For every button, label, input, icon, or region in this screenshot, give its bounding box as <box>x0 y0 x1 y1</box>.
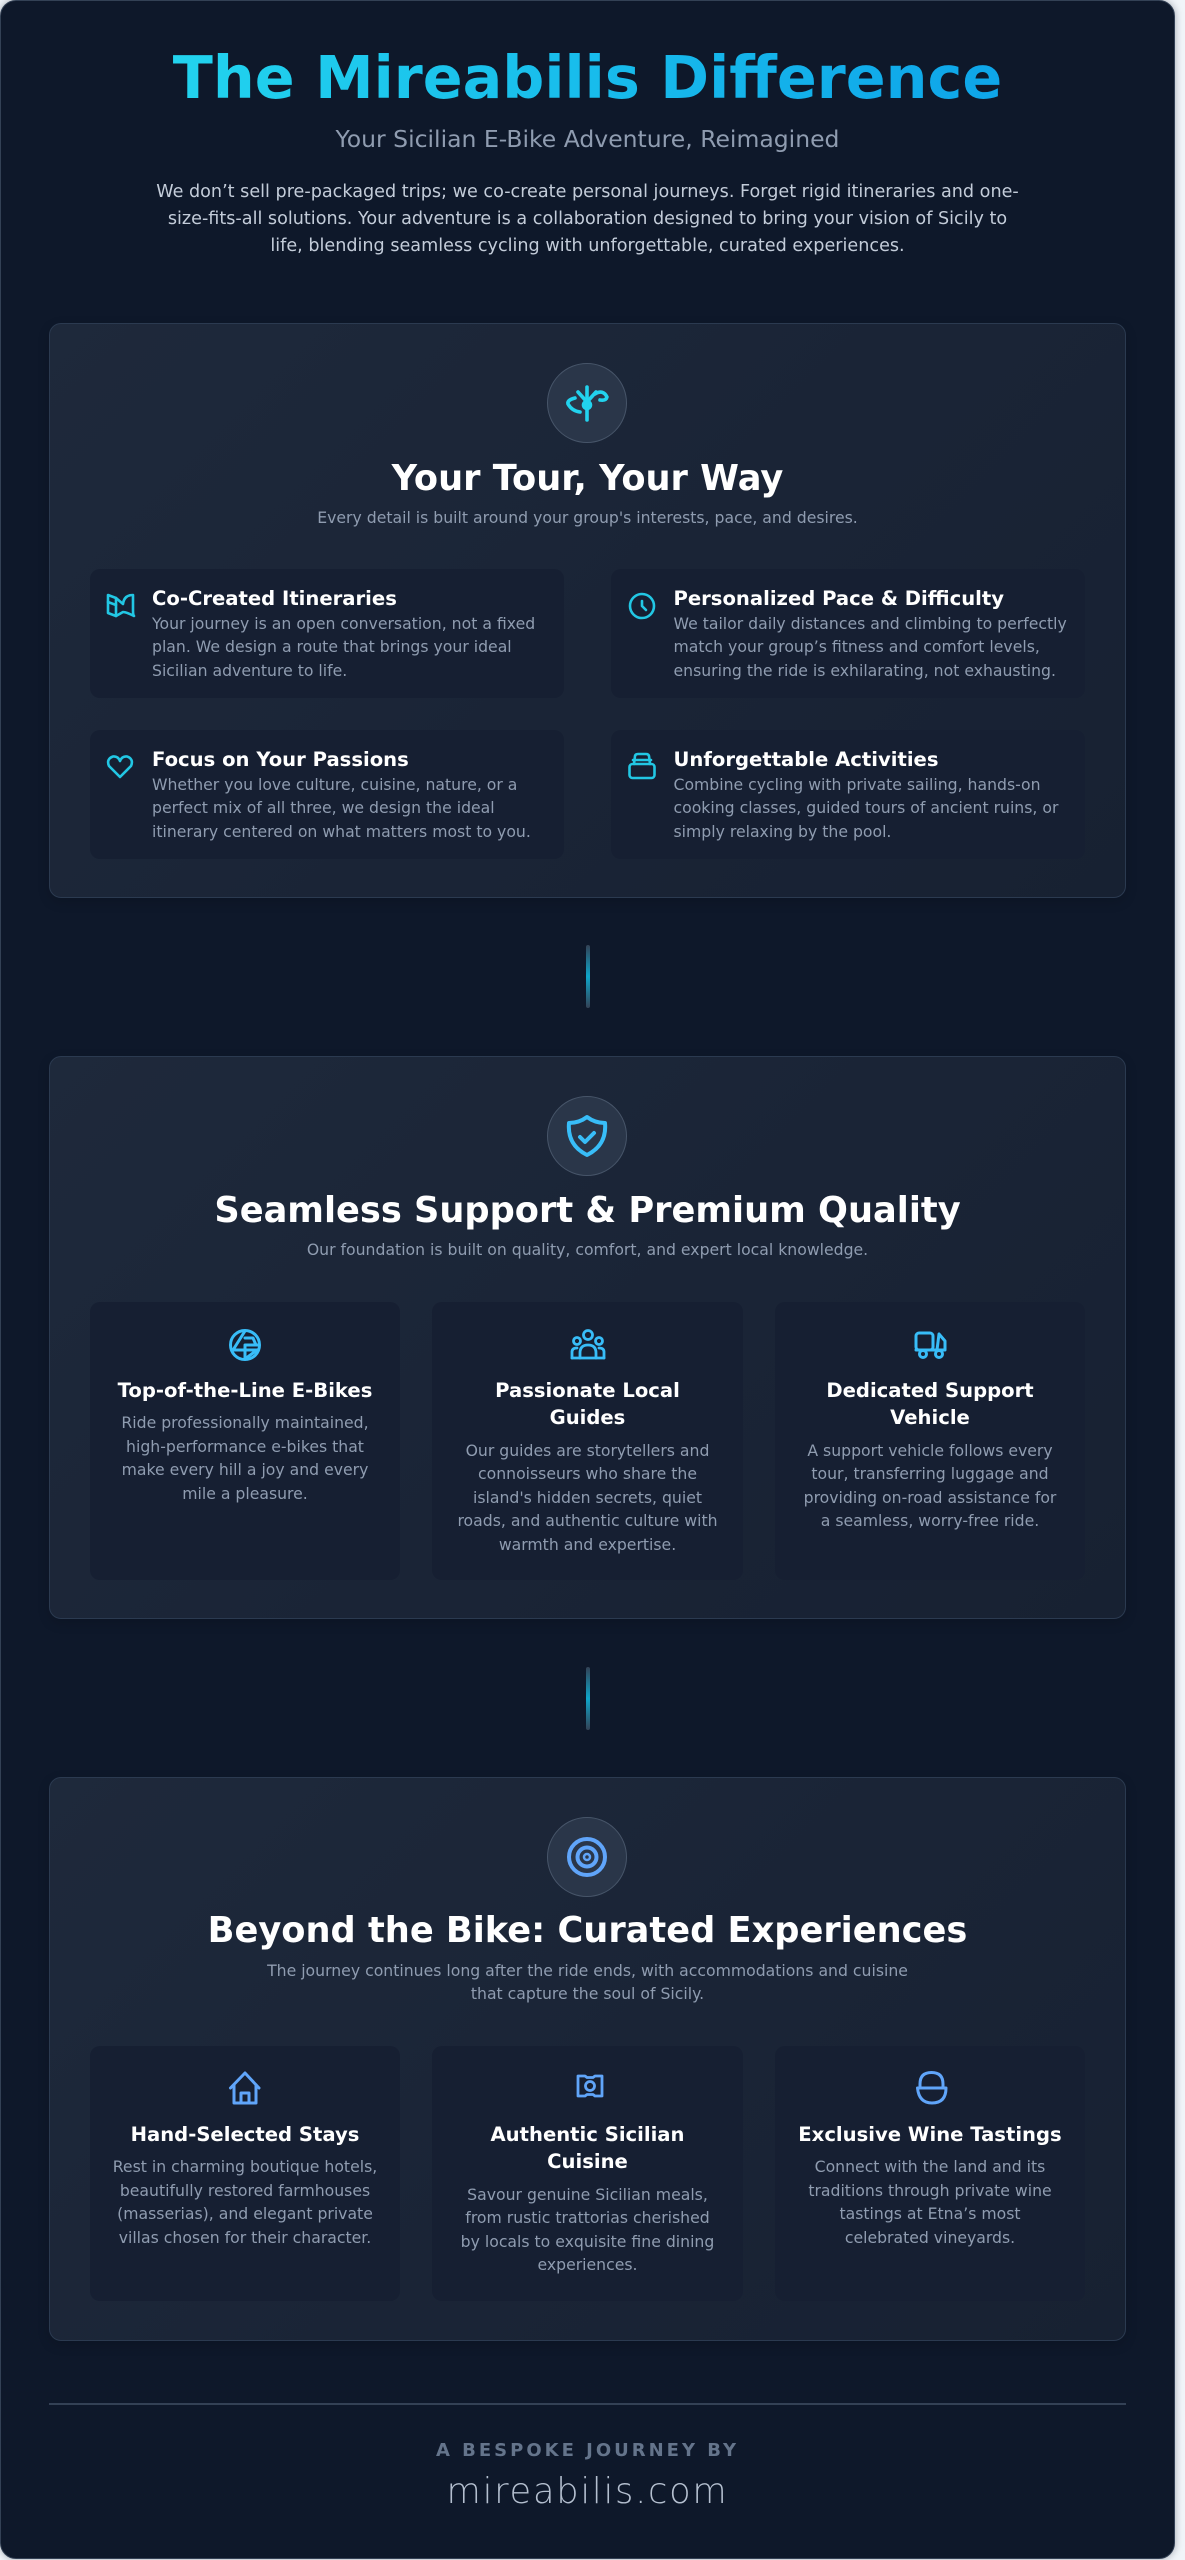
card text <box>804 1440 1056 1530</box>
card: support vehicle <box>775 1302 1085 1580</box>
card text: We tailor daily distances and climbing to perfectly <box>674 614 1067 632</box>
intro paragraph: size-fits-all solutions. Your adventure is a collaboration designed to bring your vision of Sicily to <box>168 209 1007 229</box>
icon: heart <box>106 755 134 778</box>
card text: roads, and authentic culture with <box>457 1511 718 1530</box>
card: cuisine <box>432 2046 743 2301</box>
card text <box>152 774 531 840</box>
card text: ensuring the ride is exhilarating, not exhausting. <box>674 660 1056 680</box>
card title: Unforgettable Activities <box>674 748 939 771</box>
card title: Top-of-the-Line E-Bikes <box>118 1378 372 1402</box>
card text <box>113 2157 377 2246</box>
section subheading: Every detail is built around your group's interests, pace, and desires. <box>317 508 858 527</box>
card text: Connect with the land and its <box>815 2157 1045 2176</box>
card text: Combine cycling with private sailing, hands-on <box>674 774 1041 794</box>
card text: experiences. <box>537 2255 638 2274</box>
card text: A support vehicle follows every <box>807 1440 1053 1460</box>
card title: Passionate Local <box>495 1378 680 1402</box>
card text <box>457 1440 718 1554</box>
card text: match your group’s fitness and comfort levels, <box>674 637 1040 656</box>
card text <box>674 614 1067 680</box>
card title: Hand-Selected Stays <box>131 2122 359 2146</box>
card: e-bikes <box>90 1302 400 1580</box>
icon: house <box>228 2071 261 2104</box>
card text <box>461 2184 714 2274</box>
card text: warmth and expertise. <box>499 1534 676 1554</box>
section icon: target <box>547 1816 627 1896</box>
card text: island's hidden secrets, quiet <box>473 1488 702 1506</box>
card: co-created itineraries <box>90 569 564 698</box>
panel: beyond the bike <box>49 1777 1126 2341</box>
card title: Guides <box>550 1406 625 1429</box>
intro paragraph <box>156 182 1019 256</box>
card title: Cuisine <box>547 2150 628 2173</box>
section icon: shield <box>547 1096 627 1176</box>
card: wine <box>775 2046 1085 2301</box>
panel background <box>49 1056 1126 1619</box>
card text: high-performance e-bikes that <box>126 1436 364 1456</box>
card title: Personalized Pace & Difficulty <box>674 587 1004 610</box>
card text: Our guides are storytellers and <box>466 1440 709 1460</box>
card: unforgettable activities <box>611 730 1085 859</box>
card text: providing on-road assistance for <box>804 1488 1056 1506</box>
card text <box>674 774 1058 840</box>
icon: truck <box>914 1332 946 1359</box>
card title: Vehicle <box>890 1406 970 1429</box>
card title <box>826 1378 1034 1429</box>
card text: Your journey is an open conversation, not a fixed <box>152 614 535 632</box>
card title: Co-Created Itineraries <box>152 587 397 610</box>
icon: map <box>106 594 136 618</box>
intro paragraph: We don’t sell pre-packaged trips; we co-create personal journeys. Forget rigid itineraries and one- <box>156 182 1019 202</box>
footer website: mireabilis.com <box>447 2471 728 2512</box>
card text: Savour genuine Sicilian meals, <box>467 2184 708 2204</box>
card text: Sicilian adventure to life. <box>152 660 347 680</box>
panel: your tour, your way <box>49 323 1126 898</box>
section subheading: The journey continues long after the ride ends, with accommodations and cuisine <box>267 1961 908 1980</box>
card text <box>152 614 535 680</box>
icon: activities <box>628 752 656 780</box>
section subheading: that capture the soul of Sicily. <box>471 1984 704 2003</box>
card text: Rest in charming boutique hotels, <box>113 2157 377 2176</box>
card text: Whether you love culture, cuisine, nature, or a <box>152 774 517 794</box>
icon: wheel <box>229 1329 261 1361</box>
card text: plan. We design a route that brings your ideal <box>152 637 512 656</box>
title: The Mireabilis Difference <box>173 43 1002 112</box>
section heading: Seamless Support & Premium Quality <box>214 1190 961 1231</box>
card text: from rustic trattorias cherished <box>465 2208 710 2227</box>
card title <box>495 1378 680 1429</box>
card text <box>808 2157 1052 2246</box>
card text: a seamless, worry-free ride. <box>821 1511 1039 1530</box>
card text: celebrated vineyards. <box>845 2228 1015 2246</box>
card text: itinerary centered on what matters most to you. <box>152 822 531 840</box>
section heading: Your Tour, Your Way <box>392 458 783 498</box>
card title: Focus on Your Passions <box>152 748 409 771</box>
connector <box>586 945 590 1008</box>
card text: Ride professionally maintained, <box>121 1413 369 1432</box>
section subheading <box>267 1961 908 2003</box>
card text: tastings at Etna’s most <box>839 2204 1021 2223</box>
card text: perfect mix of all three, we design the ideal <box>152 798 495 817</box>
card text: villas chosen for their character. <box>119 2228 371 2246</box>
icon: wine glass <box>916 2071 948 2104</box>
icon: group <box>570 1329 606 1360</box>
card text: (masserias), and elegant private <box>117 2204 373 2223</box>
card text <box>121 1413 369 1502</box>
panel: seamless support <box>49 1056 1126 1619</box>
footer <box>49 2403 1126 2512</box>
panel background <box>49 323 1126 898</box>
card text: tour, transferring luggage and <box>811 1464 1049 1483</box>
card text: by locals to exquisite fine dining <box>461 2232 714 2250</box>
card: local guides <box>432 1302 743 1580</box>
panel background <box>49 1777 1126 2341</box>
footer rule <box>49 2403 1126 2405</box>
card title: Exclusive Wine Tastings <box>798 2122 1062 2146</box>
card text: simply relaxing by the pool. <box>674 822 891 840</box>
section icon: cyclist <box>547 363 627 443</box>
subtitle: Your Sicilian E-Bike Adventure, Reimagined <box>336 125 839 153</box>
card: personalized pace <box>611 569 1085 698</box>
card text: traditions through private wine <box>808 2180 1052 2200</box>
card text: mile a pleasure. <box>182 1484 308 1502</box>
card title <box>490 2122 684 2173</box>
card: focus on your passions <box>90 730 564 859</box>
header <box>156 43 1019 256</box>
card title: Authentic Sicilian <box>491 2122 684 2146</box>
card text: beautifully restored farmhouses <box>120 2180 370 2200</box>
section heading: Beyond the Bike: Curated Experiences <box>208 1910 967 1951</box>
footer label: A BESPOKE JOURNEY BY <box>436 2440 739 2460</box>
intro paragraph: life, blending seamless cycling with unforgettable, curated experiences. <box>270 236 905 256</box>
section subheading: Our foundation is built on quality, comfort, and expert local knowledge. <box>307 1240 868 1258</box>
icon: clock <box>628 592 656 620</box>
card text: cooking classes, guided tours of ancient ruins, or <box>674 798 1058 817</box>
icon: camera <box>576 2074 604 2098</box>
card title: Dedicated Support <box>826 1378 1034 1402</box>
card text: make every hill a joy and every <box>122 1460 368 1479</box>
card text: connoisseurs who share the <box>478 1464 697 1483</box>
card: stays <box>90 2046 400 2301</box>
connector <box>586 1667 590 1730</box>
